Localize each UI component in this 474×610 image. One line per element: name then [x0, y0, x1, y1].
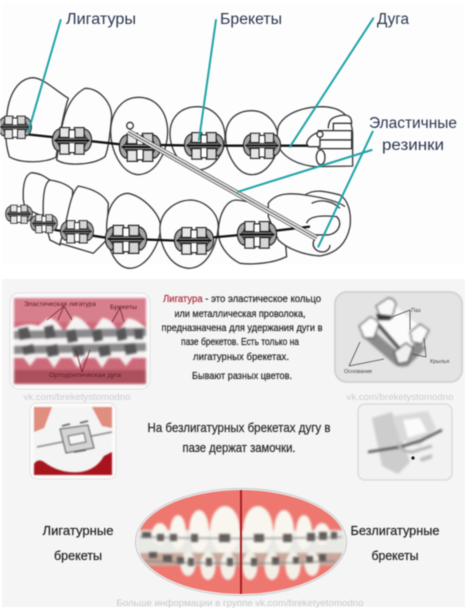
photo card: ligature teeth — [10, 293, 150, 389]
label: Брекеты: Брекеты — [220, 11, 282, 28]
label: Эластичные резинки: Эластичные — [369, 115, 457, 132]
photo card: self-ligating bracket on tooth — [30, 403, 116, 479]
panel: explanations — [2, 279, 465, 608]
anatomy labels — [344, 308, 449, 375]
ligature description text: пазе брекетов. Есть только на — [181, 336, 299, 348]
ligature description text: Бывают разных цветов. — [192, 371, 292, 382]
anatomy labels: Крылья — [430, 359, 449, 365]
footer credit: Больше информации в группе vk.com/breketyetomodno — [116, 598, 364, 608]
label: Безлигатурные брекеты: брекеты — [372, 548, 418, 563]
molar tube upper — [307, 115, 352, 165]
photo card: self-ligating bracket — [358, 404, 452, 480]
comparison oval photo — [130, 486, 352, 598]
ligature description text: предназначена для удержания дуги в — [162, 323, 322, 334]
anatomy labels: Основание — [344, 369, 372, 375]
lower teeth outlines — [23, 173, 350, 268]
ligature description text: лигатурных брекетах. — [193, 351, 289, 363]
elastic band — [127, 122, 317, 238]
label: Лигатурные брекеты: брекеты — [54, 548, 102, 563]
watermark left: vk.com/breketystomodno — [24, 392, 130, 402]
teal pointer lines — [28, 18, 373, 247]
label: Безлигатурные брекеты — [350, 523, 440, 563]
molar hook lower — [307, 216, 340, 252]
label: Безлигатурные брекеты: Безлигатурные — [350, 523, 440, 538]
brackets upper and lower — [0, 116, 281, 254]
photo labels — [24, 302, 137, 379]
ligature description text — [162, 294, 322, 382]
photo labels: Эластическая лигатура — [24, 302, 97, 308]
label: Эластичные резинки — [369, 115, 457, 154]
watermark right: vk.com/breketystomodno — [346, 392, 454, 402]
self-ligating description text — [148, 421, 331, 455]
ligature description text: или металлическая проволока, — [174, 309, 306, 320]
self-ligating description text: пазе держат замочки. — [182, 441, 296, 455]
ligature description text: Лигатура - это эластическое кольцо — [163, 294, 321, 305]
photo labels: Брекеты — [110, 305, 137, 311]
wires — [0, 132, 317, 241]
label: Дуга: Дуга — [377, 11, 409, 28]
label: Лигатурные брекеты: Лигатурные — [42, 523, 114, 538]
panel: braces diagram — [0, 3, 465, 268]
label: Лигатуры: Лигатуры — [66, 11, 136, 28]
photo labels: Ортодонтическая дуга — [49, 373, 122, 379]
label: Лигатурные брекеты — [42, 523, 114, 563]
upper teeth outlines — [6, 78, 353, 175]
label: Эластичные резинки: резинки — [382, 137, 444, 154]
self-ligating description text: На безлигатурных брекетах дугу в — [148, 421, 331, 435]
anatomy labels: Паз — [411, 308, 421, 314]
photo card: bracket anatomy — [335, 292, 462, 382]
